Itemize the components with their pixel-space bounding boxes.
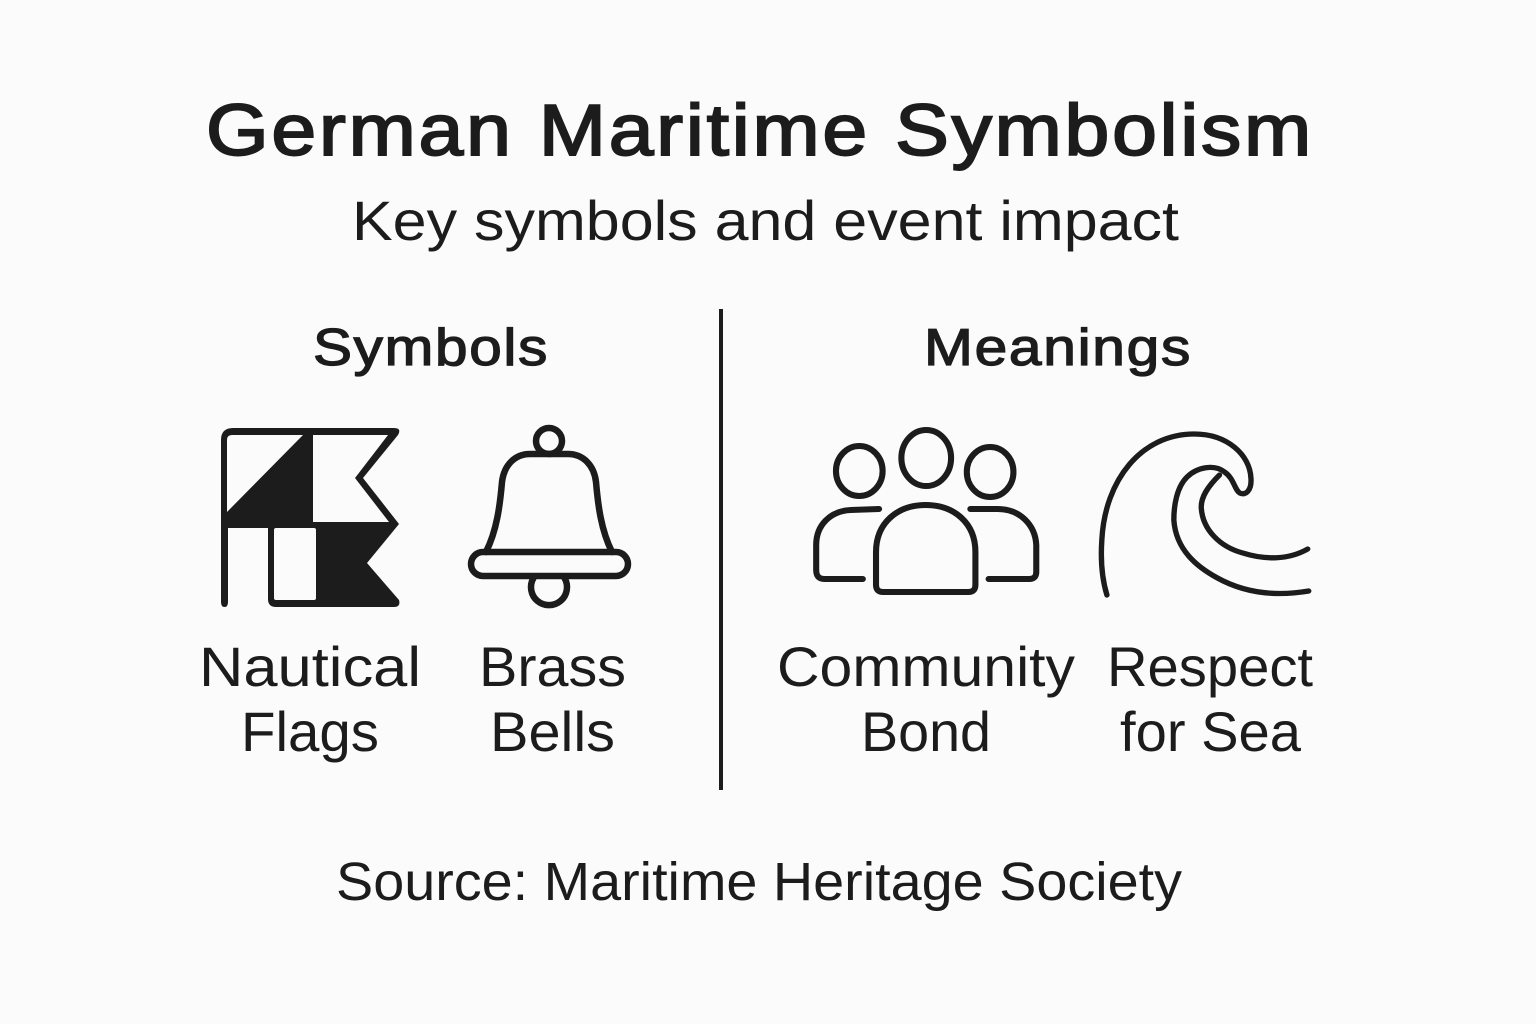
label: community bond: Bond [861, 700, 991, 763]
icon: community [816, 430, 1036, 592]
divider [719, 309, 723, 790]
source: Source: Maritime Heritage Society [336, 852, 1182, 912]
panel: symbols [199, 319, 628, 763]
panel: meanings [777, 319, 1313, 763]
label: brass bells [479, 635, 626, 763]
label: respect for sea [1107, 635, 1313, 763]
label: nautical flags: Nautical [199, 635, 421, 698]
label: brass bells: Brass [479, 635, 626, 698]
icon: wave [1101, 434, 1309, 595]
icon: brass bell [471, 428, 628, 605]
label: nautical flags [199, 635, 421, 763]
label: community bond: Community [777, 635, 1075, 698]
heading: meanings: Meanings [924, 319, 1192, 377]
label: respect for sea: Respect [1107, 635, 1313, 698]
heading: symbols: Symbols [313, 319, 549, 377]
label: community bond [777, 635, 1075, 763]
label: brass bells: Bells [490, 700, 615, 763]
label: respect for sea: for Sea [1120, 700, 1302, 763]
title: German Maritime Symbolism [206, 91, 1314, 171]
label: nautical flags: Flags [241, 700, 379, 763]
icon: nautical flags [221, 428, 399, 607]
subtitle: Key symbols and event impact [352, 189, 1179, 252]
